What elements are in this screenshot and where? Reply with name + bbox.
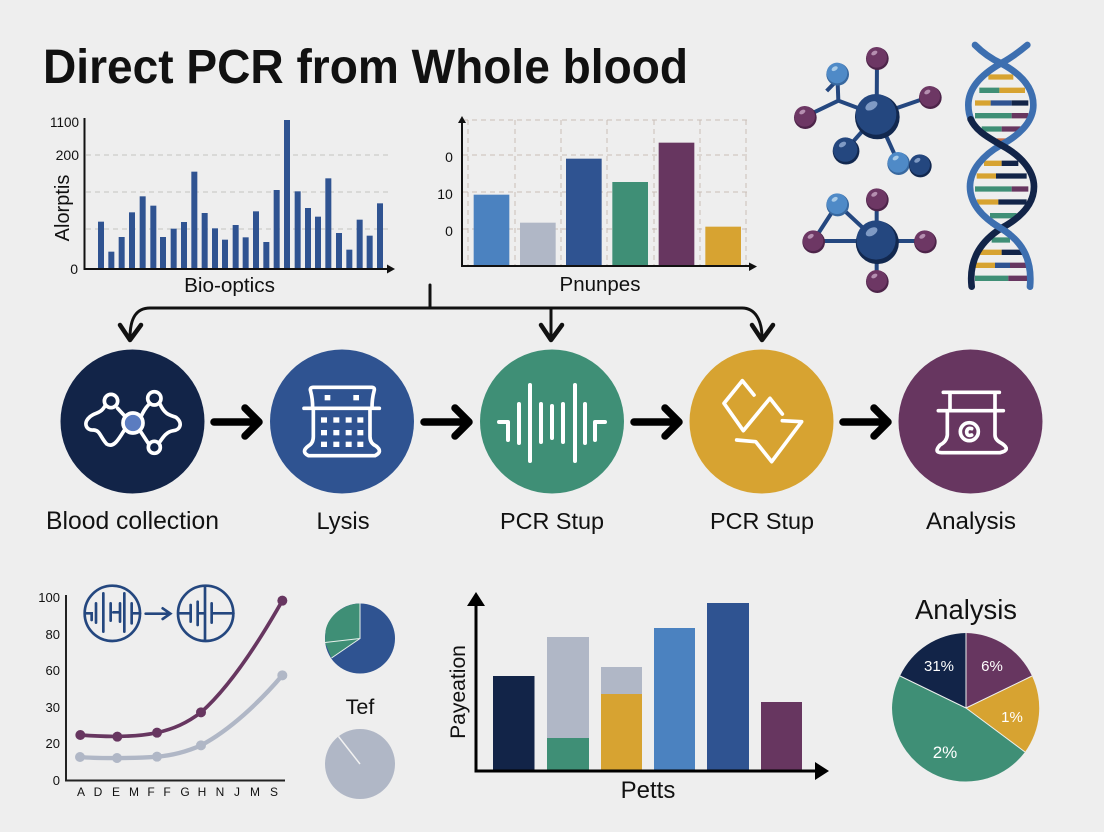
x axis labels: M	[129, 785, 139, 799]
step: Lysis	[270, 350, 414, 535]
strands	[970, 45, 1033, 287]
arrow: step 3 to 4	[634, 408, 679, 436]
connector: branching arrows	[120, 285, 773, 340]
label: Lysis	[316, 509, 370, 535]
icon: molecule network	[86, 392, 180, 453]
y axis labels: 1100	[50, 114, 79, 130]
y axis labels: 0	[70, 261, 78, 277]
y axis labels: 200	[56, 147, 79, 163]
axes	[66, 595, 285, 780]
y axis title: Alorptis	[52, 175, 74, 241]
axes	[476, 603, 818, 771]
icon: signal conversion	[85, 586, 233, 641]
x axis labels: E	[112, 785, 120, 799]
slice labels: 6%	[981, 658, 1003, 675]
label: Analysis	[926, 508, 1016, 535]
slice labels: 2%	[933, 743, 957, 762]
arrow: step 1 to 2	[214, 408, 259, 436]
x axis labels: D	[94, 785, 103, 799]
arrow: step 4 to 5	[843, 408, 888, 436]
chart: small pie	[325, 604, 395, 674]
chart: Payeation bar chart	[447, 592, 829, 804]
series lines and markers	[75, 596, 287, 763]
chart: Bio-optics bar chart	[50, 114, 395, 297]
x axis labels: F	[147, 785, 155, 799]
x axis labels: N	[216, 785, 224, 799]
x axis labels	[77, 785, 278, 799]
x axis labels: A	[77, 785, 85, 799]
axes	[462, 122, 750, 266]
slice labels	[924, 658, 1023, 762]
y axis title: Payeation	[447, 645, 470, 739]
y axis labels	[437, 149, 453, 239]
y axis labels: 10	[437, 186, 453, 202]
icon: molecule upper	[794, 47, 942, 177]
x axis labels: G	[180, 785, 190, 799]
label: PCR Stup	[710, 508, 814, 534]
x axis labels: F	[163, 785, 171, 799]
y axis labels: 60	[46, 663, 60, 678]
y axis labels	[38, 590, 60, 788]
arrow: step 2 to 3	[424, 408, 469, 436]
icon: zigzag diamonds	[724, 381, 802, 462]
icon: waveform	[499, 385, 605, 461]
slice labels: 31%	[924, 658, 954, 675]
title: Direct PCR from Whole blood	[43, 41, 688, 94]
y axis labels: 30	[46, 700, 60, 715]
label: PCR Stup	[500, 508, 604, 534]
icon: DNA double helix	[968, 45, 1034, 287]
icon: analyzer instrument	[937, 392, 1006, 453]
y axis labels: 20	[46, 736, 60, 751]
step: Blood collection	[46, 350, 219, 535]
base pairs	[975, 77, 1028, 278]
x axis title: Pnunpes	[560, 273, 640, 296]
y axis labels: 0	[445, 223, 453, 239]
bars	[493, 603, 802, 770]
slice labels: 1%	[1001, 709, 1023, 726]
y axis labels: 100	[38, 590, 60, 605]
step: PCR Stup	[480, 350, 624, 534]
label: Blood collection	[46, 508, 219, 535]
y axis labels: 80	[46, 627, 60, 642]
chart: line chart	[38, 586, 287, 799]
label: Analysis pie title: Analysis	[915, 594, 1017, 625]
step: Analysis	[898, 350, 1042, 535]
x axis title: Petts	[621, 777, 675, 804]
x axis labels: M	[250, 785, 260, 799]
icon: beaker keypad	[304, 387, 379, 456]
y axis labels: 0	[53, 773, 60, 788]
bars: Pnunpes	[474, 143, 741, 266]
icon: molecule lower	[802, 188, 937, 293]
bars: Bio-optics	[98, 120, 383, 269]
x axis labels: S	[270, 785, 278, 799]
chart: Analysis pie	[892, 633, 1039, 782]
axes	[84, 118, 388, 269]
chart: Pnunpes bar chart	[437, 116, 757, 296]
x axis labels: J	[234, 785, 240, 799]
label: Tef: Tef	[346, 695, 374, 719]
y axis labels: 0	[445, 149, 453, 165]
x axis title: Bio-optics	[184, 274, 275, 297]
step: PCR Stup 2	[690, 350, 834, 534]
y axis labels	[50, 114, 79, 277]
x axis labels: H	[198, 785, 206, 799]
chart: gray pie	[325, 729, 395, 799]
